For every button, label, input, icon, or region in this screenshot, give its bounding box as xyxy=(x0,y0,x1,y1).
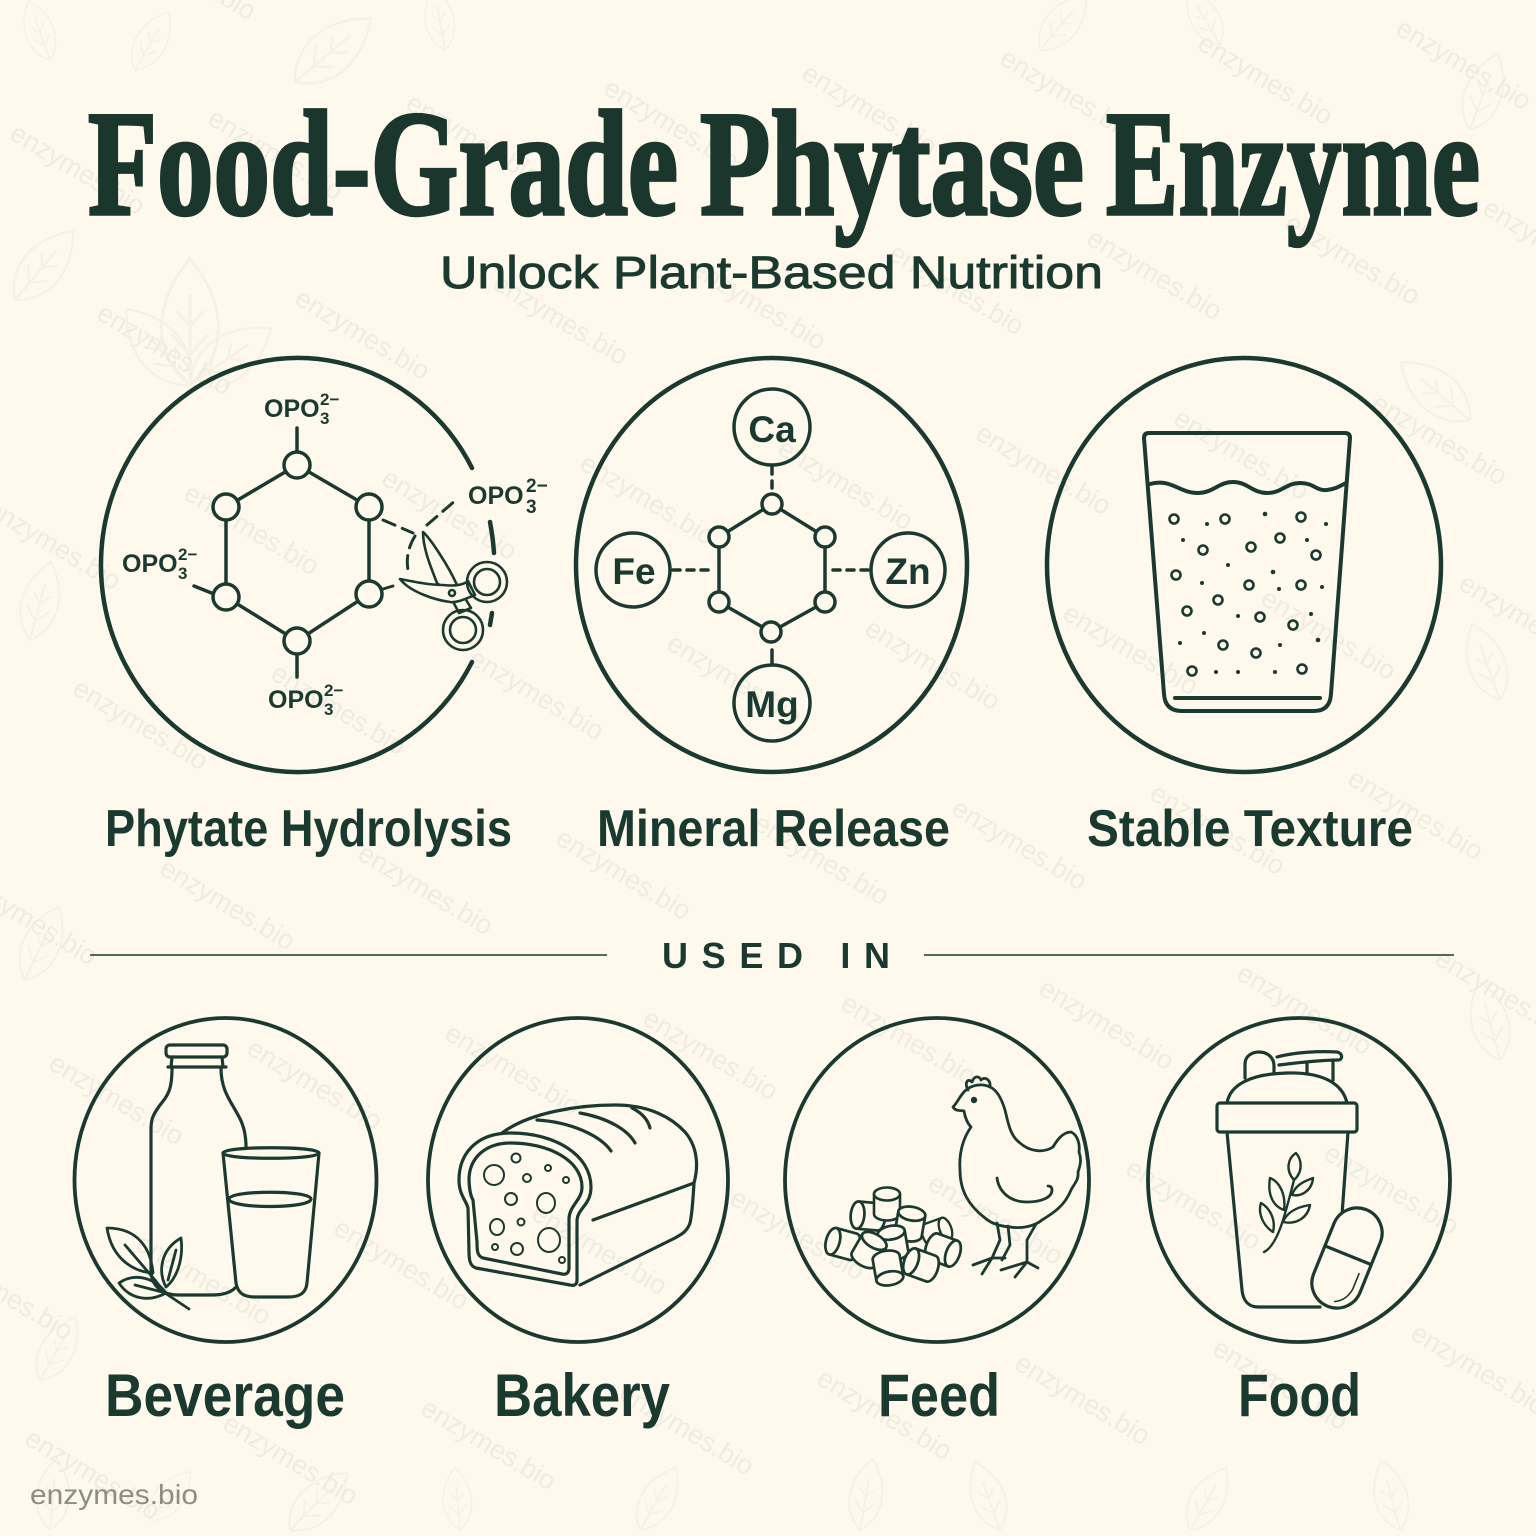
background watermark: enzymes.bio xyxy=(836,987,981,1091)
background watermark: enzymes.bio xyxy=(179,477,324,581)
background watermark: enzymes.bio xyxy=(1319,1137,1464,1241)
background watermark: enzymes.bio xyxy=(947,792,1092,896)
label: OPO3 bottom: OPO xyxy=(268,686,324,714)
label: OPO3 bottom: 3 xyxy=(324,700,333,719)
bread holes xyxy=(484,1154,569,1263)
background watermark: enzymes.bio xyxy=(488,267,633,371)
background watermark: enzymes.bio xyxy=(1082,222,1227,326)
icon: bread loaf xyxy=(459,1105,697,1285)
label: OPO3 top: 2− xyxy=(320,390,339,409)
circle frame xyxy=(1148,1018,1450,1342)
background watermark: enzymes.bio xyxy=(203,102,348,206)
background watermark: enzymes.bio xyxy=(725,1182,870,1286)
background watermark: enzymes.bio xyxy=(1256,582,1401,686)
element: Fe: Fe xyxy=(612,551,656,592)
panel: stable texture xyxy=(1047,358,1441,772)
panel: beverage xyxy=(74,1018,376,1342)
label: OPO3 left: 2− xyxy=(178,545,197,564)
icon: chicken xyxy=(953,1077,1081,1277)
element: Zn: Zn xyxy=(885,551,931,592)
element: Fe xyxy=(596,533,670,607)
hexagon molecule xyxy=(673,467,870,663)
element: Zn xyxy=(871,533,945,607)
element: Mg: Mg xyxy=(745,684,799,725)
background watermark: enzymes.bio xyxy=(860,612,1005,716)
label: OPO3 top: 3 xyxy=(320,409,329,428)
background watermark: enzymes.bio xyxy=(812,1362,957,1466)
background watermark: enzymes.bio xyxy=(131,1227,276,1331)
background watermark: enzymes.bio xyxy=(155,852,300,956)
title: Phytase xyxy=(700,81,1084,247)
panel: bakery xyxy=(428,1018,728,1342)
background watermark: enzymes.bio xyxy=(440,1017,585,1121)
background watermark: enzymes.bio xyxy=(401,87,546,191)
icon: wheat sprig xyxy=(1260,1153,1313,1252)
circle frame with gap xyxy=(101,358,494,772)
background watermark: enzymes.bio xyxy=(1193,27,1338,131)
background watermark: enzymes.bio xyxy=(971,417,1116,521)
label: OPO3 bottom: 2− xyxy=(324,681,343,700)
panel: feed xyxy=(785,1018,1089,1342)
dots xyxy=(1178,512,1328,674)
background watermark: enzymes.bio xyxy=(266,657,411,761)
background watermark: enzymes.bio xyxy=(1208,1332,1353,1436)
label: OPO3 right: OPO xyxy=(468,482,524,510)
panel: phytate hydrolysis xyxy=(101,358,548,772)
icon: bottle xyxy=(151,1045,246,1295)
background watermark: enzymes.bio xyxy=(68,672,213,776)
background watermark: enzymes.bio xyxy=(242,1032,387,1136)
background watermark: enzymes.bio xyxy=(995,42,1140,146)
background watermark: enzymes.bio xyxy=(1391,12,1536,116)
label: OPO3 left: OPO xyxy=(122,550,178,578)
label: OPO3 top xyxy=(264,390,339,428)
background watermark: enzymes.bio xyxy=(1169,402,1314,506)
background watermark: enzymes.bio xyxy=(44,1047,189,1151)
icon: glass xyxy=(1144,433,1350,711)
background watermark: enzymes.bio xyxy=(662,627,807,731)
background watermark: enzymes.bio xyxy=(1034,972,1179,1076)
label: OPO3 right: 3 xyxy=(526,497,537,518)
background watermark: enzymes.bio xyxy=(1367,387,1512,491)
background watermark: enzymes.bio xyxy=(1280,207,1425,311)
background watermark: enzymes.bio xyxy=(1343,762,1488,866)
background watermark: enzymes.bio xyxy=(1145,777,1290,881)
label: food: Food xyxy=(1238,1362,1361,1429)
circle frame xyxy=(74,1018,376,1342)
bubbles xyxy=(1170,512,1320,676)
title: Food-Grade xyxy=(88,81,678,247)
background watermark: enzymes.bio xyxy=(1010,1347,1155,1451)
label: feed: Feed xyxy=(878,1362,1000,1429)
element: Ca: Ca xyxy=(748,409,796,450)
circle frame xyxy=(785,1018,1089,1342)
background watermark: enzymes.bio xyxy=(353,837,498,941)
background watermark: enzymes.bio xyxy=(599,72,744,176)
background watermark: enzymes.bio xyxy=(638,1002,783,1106)
background watermark: enzymes.bio xyxy=(329,1212,474,1316)
hexagon molecule xyxy=(194,428,382,677)
label: phytate hydrolysis: Phytate Hydrolysis xyxy=(105,800,512,858)
icon: leaves xyxy=(107,1228,189,1309)
title xyxy=(88,81,1480,247)
background watermark: enzymes.bio xyxy=(416,1392,561,1496)
background watermark: enzymes.bio xyxy=(749,807,894,911)
label: OPO3 bottom xyxy=(268,681,343,719)
element: Mg xyxy=(734,665,810,741)
background watermark: enzymes.bio xyxy=(377,462,522,566)
icon: glass xyxy=(223,1148,319,1297)
background watermark: enzymes.bio xyxy=(92,297,237,401)
label: OPO3 left xyxy=(122,545,197,583)
label: bakery: Bakery xyxy=(494,1362,671,1429)
divider: used in: USED IN xyxy=(662,935,890,976)
background watermark: enzymes.bio xyxy=(614,1377,759,1481)
background watermark: enzymes.bio xyxy=(923,1167,1068,1271)
background watermark: enzymes.bio xyxy=(1232,957,1377,1061)
label: OPO3 right xyxy=(468,476,548,518)
icon: scissors xyxy=(400,532,507,650)
panel: food xyxy=(1148,1018,1450,1342)
background watermark: enzymes.bio xyxy=(1058,597,1203,701)
label: OPO3 top: OPO xyxy=(264,395,320,423)
background watermark: enzymes.bio xyxy=(527,1197,672,1301)
footer brand: enzymes.bio xyxy=(30,1479,198,1510)
circle frame xyxy=(1047,358,1441,772)
background watermark: enzymes.bio xyxy=(797,57,942,161)
background watermark: enzymes.bio xyxy=(464,642,609,746)
background watermark: enzymes.bio xyxy=(290,282,435,386)
background watermark: enzymes.bio xyxy=(773,432,918,536)
dashed cut lines xyxy=(383,500,456,589)
icon: capsule xyxy=(1304,1200,1390,1316)
background watermark: enzymes.bio xyxy=(1121,1152,1266,1256)
circle frame xyxy=(576,358,967,772)
background watermark: enzymes.bio xyxy=(5,117,150,221)
background watermark: enzymes.bio xyxy=(218,1407,363,1511)
subtitle: Unlock Plant-Based Nutrition xyxy=(440,247,1103,298)
icon: shaker bottle xyxy=(1217,1052,1357,1307)
background watermark: enzymes.bio xyxy=(575,447,720,551)
background watermark: enzymes.bio xyxy=(20,1422,165,1526)
icon: feed pellets xyxy=(823,1188,964,1287)
element: Ca xyxy=(734,389,810,465)
label: beverage: Beverage xyxy=(105,1362,345,1429)
background watermark: enzymes.bio xyxy=(884,237,1029,341)
circle frame xyxy=(428,1018,728,1342)
label: OPO3 left: 3 xyxy=(178,564,187,583)
label: mineral release: Mineral Release xyxy=(597,800,950,858)
label: OPO3 right: 2− xyxy=(526,476,548,497)
label: stable texture: Stable Texture xyxy=(1087,800,1413,858)
panel: mineral release xyxy=(576,358,967,772)
background watermark: enzymes.bio xyxy=(551,822,696,926)
background watermark: enzymes.bio xyxy=(686,252,831,356)
